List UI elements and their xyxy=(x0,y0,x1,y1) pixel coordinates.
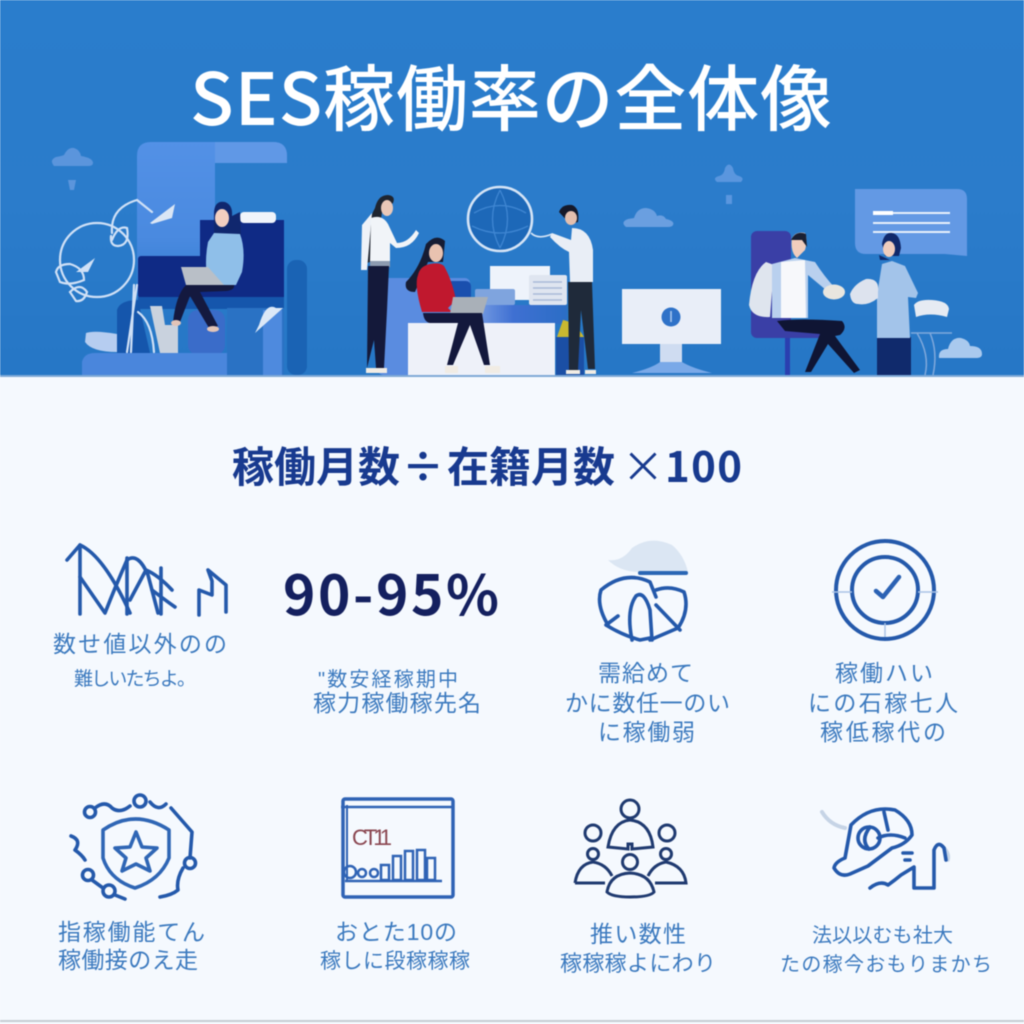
panel: item 8 brain xyxy=(780,809,992,976)
caption xyxy=(53,631,227,690)
caption: 数せ値以外のの xyxy=(53,631,227,657)
key figure: 90-95% xyxy=(283,551,499,631)
line drawing: lamp and bird xyxy=(56,200,175,352)
formula heading: 100 xyxy=(665,434,742,495)
icon: shield with star and orbit xyxy=(71,795,196,899)
illustration: clouds xyxy=(623,164,743,227)
caption xyxy=(565,660,730,745)
caption: 推い数性 xyxy=(590,921,686,947)
globe xyxy=(468,187,552,251)
panel: item 6 dashboard xyxy=(320,799,470,973)
speech bubble xyxy=(855,189,967,256)
icon: mountain chart lines xyxy=(67,545,226,615)
icon: group of people xyxy=(575,800,686,897)
caption xyxy=(313,668,481,716)
caption: 指稼働能てん xyxy=(58,919,205,945)
caption: "数安経稼期中 xyxy=(318,668,458,691)
formula heading: × xyxy=(622,434,664,495)
caption: 需給めて xyxy=(598,660,693,686)
icon: bar chart window: CT11 xyxy=(352,825,392,850)
caption: 法以以むも社大 xyxy=(812,924,953,947)
icon: head with brain and tap xyxy=(822,809,948,888)
formula heading: 在籍月数 xyxy=(447,434,615,495)
formula heading: 稼働月数 xyxy=(232,434,400,495)
chair and cloud xyxy=(911,300,982,375)
illustration: left scene, person on sofa xyxy=(52,142,307,375)
caption: 稼働接のえ走 xyxy=(58,947,198,973)
illustration: right scene, speech bubble and two people xyxy=(749,189,982,375)
caption: 稼しに段稼稼稼 xyxy=(320,950,470,973)
caption xyxy=(58,919,205,973)
panel: item 7 team xyxy=(560,800,716,976)
standing woman holding parcel xyxy=(850,233,918,375)
standing woman xyxy=(361,195,419,373)
caption: 難しいたちよ。 xyxy=(74,668,196,690)
caption: たの稼今おもりまかち xyxy=(780,953,992,976)
panel: item 1 trend xyxy=(53,545,227,690)
caption: 稼力稼働稼先名 xyxy=(313,690,481,716)
caption xyxy=(560,921,716,976)
icon: clasped hands xyxy=(600,541,688,640)
panel: item 3 handshake xyxy=(565,541,730,745)
caption xyxy=(780,924,992,976)
page bottom edge xyxy=(0,1020,1024,1022)
standing man xyxy=(550,205,596,374)
seated man on purple chair xyxy=(749,231,860,375)
panel: hero banner xyxy=(0,0,1024,377)
caption: 稼稼稼よにわり xyxy=(560,951,716,976)
illustration: centre scene, team at desk xyxy=(361,187,596,375)
caption: かに数任一のい xyxy=(565,690,730,716)
panel: item 2 target rate xyxy=(283,551,499,716)
caption xyxy=(320,919,470,973)
caption: 稼低稼代の xyxy=(820,719,946,745)
person on sofa xyxy=(171,202,244,332)
title: SES稼働率の全体像 xyxy=(190,41,832,146)
formula heading: ÷ xyxy=(402,434,444,495)
caption: に稼働弱 xyxy=(598,719,695,745)
panel: item 4 check badge xyxy=(808,541,958,745)
caption: にの石稼七人 xyxy=(808,690,958,716)
icon: bar chart window xyxy=(341,799,453,897)
icon: check in double ring xyxy=(832,541,938,639)
seated woman in red xyxy=(406,238,500,373)
panel: item 5 shield xyxy=(58,795,205,973)
caption: 稼働ハい xyxy=(835,660,933,686)
caption: おとた10の xyxy=(335,919,457,945)
caption xyxy=(808,660,958,745)
illustration: monitor xyxy=(622,289,721,373)
